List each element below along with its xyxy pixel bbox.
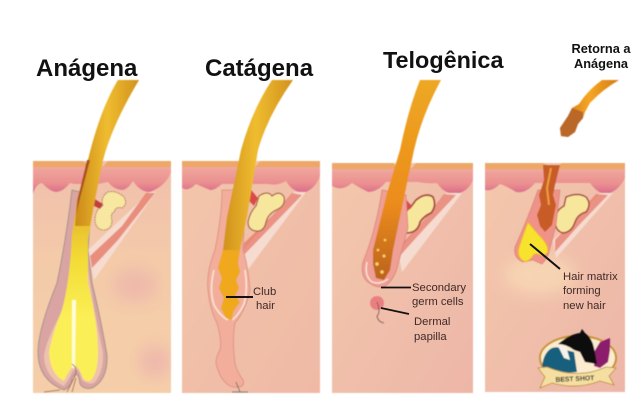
title: Retorna a Anágena: Retorna a — [571, 41, 631, 56]
callout: dermal papilla — [381, 308, 450, 343]
icon: shed hair returning to anagen — [560, 80, 619, 137]
callout: club hair: Club — [253, 286, 276, 298]
callout: hair matrix forming new hair: forming — [563, 285, 601, 297]
follicle sheath — [208, 190, 250, 387]
callout: dermal papilla: papilla — [414, 331, 447, 343]
callout: hair matrix forming new hair: new hair — [563, 300, 606, 312]
follicle sheath and bulb — [38, 190, 107, 390]
title: Retorna a Anágena: Anágena — [574, 56, 629, 71]
panel: telogen follicle — [332, 80, 473, 393]
arrector muscle — [243, 192, 306, 272]
sebaceous gland — [95, 192, 126, 230]
follicle sheath — [362, 190, 408, 287]
shed hair stump — [537, 165, 560, 232]
callout: hair matrix forming new hair: Hair matrix — [563, 271, 618, 283]
dermal papilla — [370, 296, 384, 310]
hair matrix — [518, 222, 548, 261]
callout: club hair — [226, 286, 276, 312]
callout: secondary germ cells: germ cells — [412, 296, 464, 308]
hair — [49, 80, 139, 381]
title: Telogênica: Telogênica — [383, 47, 504, 73]
icon: Best Shot logo: BEST SHOT — [555, 375, 595, 384]
callout: hair matrix forming new hair — [530, 244, 618, 312]
sebaceous gland — [400, 195, 435, 233]
sebaceous gland — [555, 194, 589, 233]
follicle sheath — [515, 190, 560, 264]
club hair — [373, 80, 441, 280]
panel: anagen follicle — [33, 80, 171, 393]
sebaceous gland — [248, 193, 284, 231]
callout: secondary germ cells: Secondary — [412, 282, 466, 294]
arrector muscle — [398, 193, 462, 272]
panel: catagen follicle — [182, 80, 320, 393]
callout: club hair: hair — [256, 300, 275, 312]
title: Catágena: Catágena — [205, 55, 314, 82]
title: Anágena: Anágena — [36, 55, 138, 82]
arrector muscle — [553, 193, 613, 258]
ribbon — [538, 367, 616, 388]
panel: new anagen follicle — [485, 163, 625, 392]
callout: dermal papilla: Dermal — [414, 316, 450, 328]
arrector muscle — [88, 192, 156, 280]
callout: secondary germ cells — [381, 282, 466, 308]
title: Retorna a Anágena — [571, 41, 631, 71]
club hair — [218, 80, 293, 320]
icon: Best Shot logo — [538, 329, 616, 388]
